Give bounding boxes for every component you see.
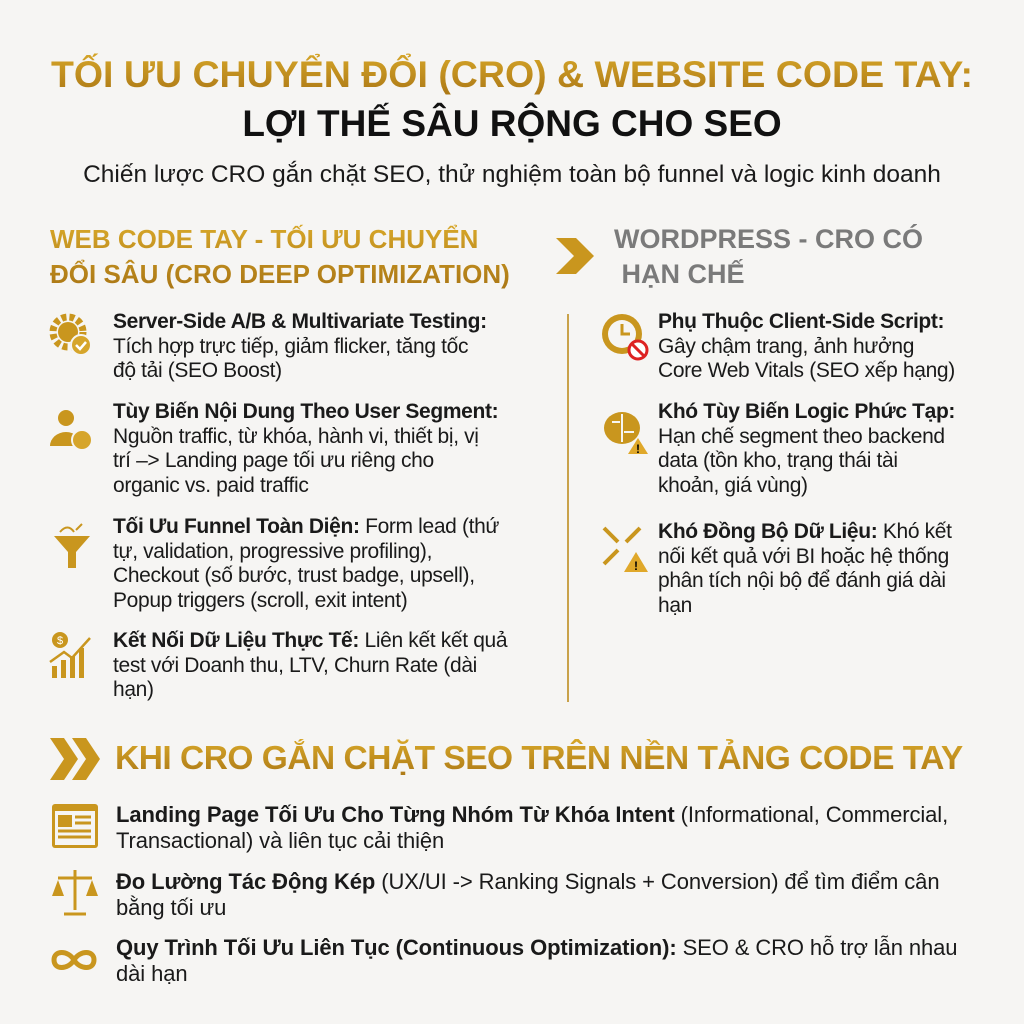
item b3: dài hạn [116,961,187,986]
item r1: Core Web Vitals (SEO xếp hạng) [658,359,955,382]
panel: bottom items [52,802,957,986]
item r1 [658,310,955,382]
item b1: Landing Page Tối Ưu Cho Từng Nhóm Từ Khóa Intent (Informational, Commercial, [116,802,948,827]
icon: scale [52,870,98,916]
item b1: Transactional) và liên tục cải thiện [116,828,444,853]
icon: chart: $ [57,635,63,647]
icon: double chevron [50,738,100,780]
item 1: độ tải (SEO Boost) [113,359,282,382]
right heading: HẠN CHẾ [622,259,745,289]
item 2: organic vs. paid traffic [113,474,308,496]
right heading [614,224,923,289]
item r2: khoản, giá vùng) [658,474,808,496]
item 2: Tùy Biến Nội Dung Theo User Segment: [113,400,498,423]
divider [567,314,569,702]
left heading: WEB CODE TAY - TỐI ƯU CHUYỂN [50,224,478,254]
item 3: Checkout (số bước, trust badge, upsell), [113,564,475,587]
item b2: bằng tối ưu [116,895,226,920]
icon: chevron [556,238,594,274]
panel: left items [49,310,508,701]
icon: gear [50,314,90,354]
item 4 [113,629,508,701]
item r3: phân tích nội bộ để đánh giá dài [658,569,946,592]
item 4: Kết Nối Dữ Liệu Thực Tế: Liên kết kết quả [113,629,507,652]
item 3 [113,515,499,612]
left heading: ĐỔI SÂU (CRO DEEP OPTIMIZATION) [50,259,510,289]
icon: brain: ! [636,442,640,456]
icon: user [50,410,91,449]
item b2: Đo Lường Tác Động Kép (UX/UI -> Ranking Signals + Conversion) để tìm điểm cân [116,869,939,894]
item 2: Nguồn traffic, từ khóa, hành vi, thiết bị, vị [113,424,479,448]
bottom heading: KHI CRO GẮN CHẶT SEO TRÊN NỀN TẢNG CODE TAY [115,740,963,777]
item 2: trí –> Landing page tối ưu riêng cho [113,449,434,472]
item 2 [113,400,498,496]
title: TỐI ƯU CHUYỂN ĐỔI (CRO) & WEBSITE CODE TAY: [51,53,973,95]
icon: clock [602,314,648,360]
item 3: tự, validation, progressive profiling), [113,540,432,562]
item 1: Server-Side A/B & Multivariate Testing: [113,310,487,333]
item r2: Hạn chế segment theo backend [658,424,945,448]
left heading [50,222,510,292]
item 1 [113,310,487,382]
icon: funnel [54,523,90,568]
item r2: data (tồn kho, trạng thái tài [658,449,898,472]
icon: disconnected: ! [634,559,638,573]
panel: right items [602,310,955,616]
item r3 [658,520,952,616]
icon: disconnected [602,526,648,573]
item 3: Tối Ưu Funnel Toàn Diện: Form lead (thứ [113,515,499,538]
item b3 [116,935,957,986]
icon: loop [52,950,96,970]
icon: chart [49,632,91,678]
icon: landing page [52,804,98,848]
icon: brain [604,412,648,456]
item 3: Popup triggers (scroll, exit intent) [113,588,407,612]
title: LỢI THẾ SÂU RỘNG CHO SEO [242,103,782,144]
item r3: hạn [658,594,692,616]
item b2 [116,869,939,920]
right heading: WORDPRESS - CRO CÓ [614,224,923,254]
item r3: nối kết quả với BI hoặc hệ thống [658,544,949,568]
item b1 [116,802,948,853]
item r2 [658,400,955,496]
item 4: hạn) [113,678,154,701]
item r1: Gây chậm trang, ảnh hưởng [658,334,914,358]
item r1: Phụ Thuộc Client-Side Script: [658,310,944,333]
title [51,53,973,144]
item r3: Khó Đồng Bộ Dữ Liệu: Khó kết [658,520,952,543]
item r2: Khó Tùy Biến Logic Phức Tạp: [658,400,955,423]
subtitle: Chiến lược CRO gắn chặt SEO, thử nghiệm toàn bộ funnel và logic kinh doanh [83,161,941,188]
item 1: Tích hợp trực tiếp, giảm flicker, tăng tốc [113,334,468,358]
item b3: Quy Trình Tối Ưu Liên Tục (Continuous Optimization): SEO & CRO hỗ trợ lẫn nhau [116,935,957,960]
item 4: test với Doanh thu, LTV, Churn Rate (dài [113,654,477,676]
